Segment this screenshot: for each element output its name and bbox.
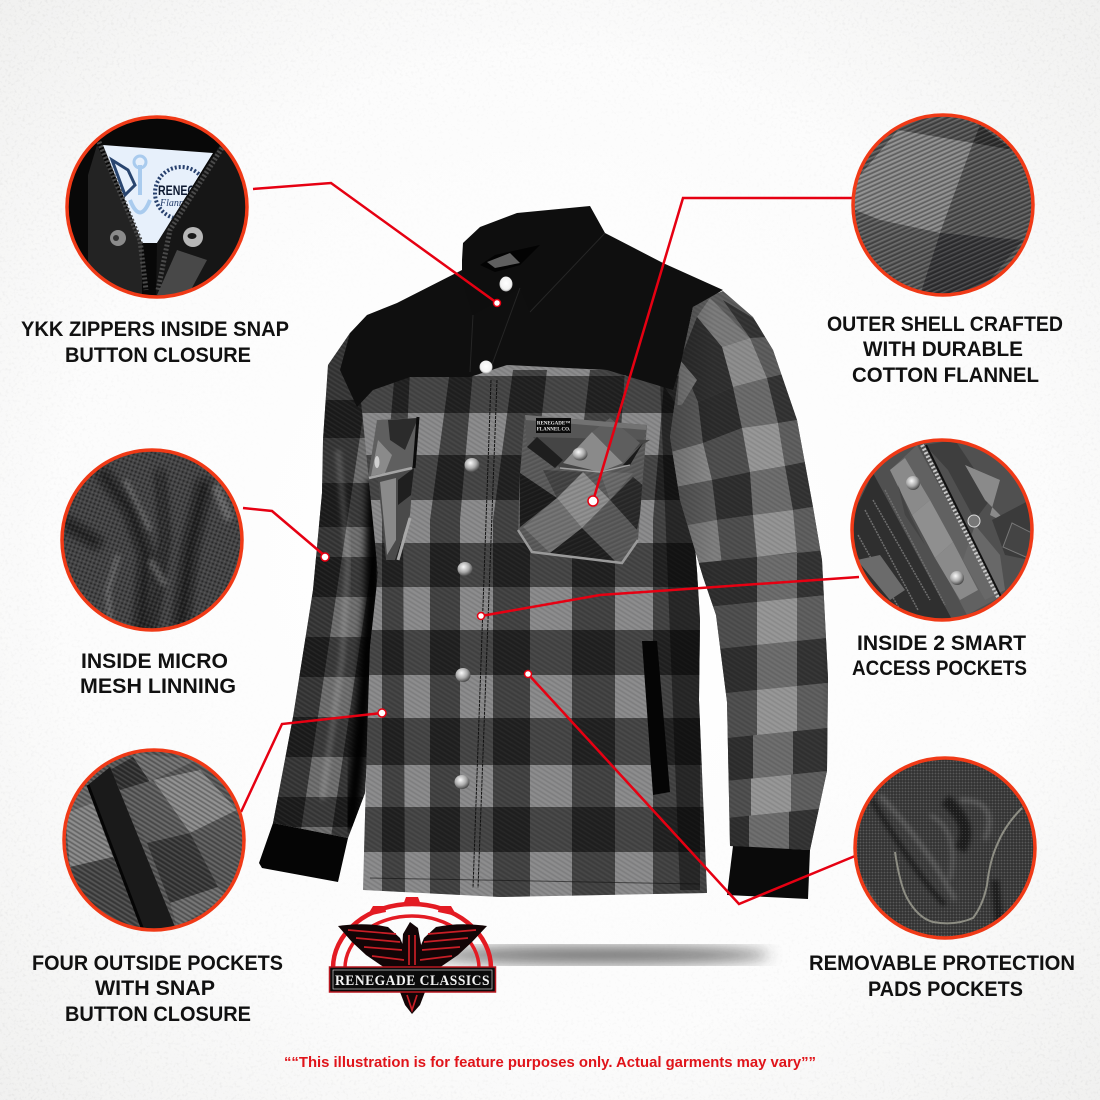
collar [462, 206, 605, 372]
placket checks [890, 445, 1000, 615]
callout line: mesh lining [243, 508, 325, 556]
left cuff [259, 823, 348, 882]
side hand pocket [642, 641, 670, 795]
callout line: outside pockets [241, 713, 382, 812]
caption: mesh lining: MESH LINNING [80, 675, 236, 698]
caption: smart pockets: ACCESS POCKETS [852, 657, 1027, 680]
brand logo [330, 897, 496, 1014]
sleeve shoulder cells [677, 298, 785, 413]
snap buttons [454, 276, 512, 789]
callout line: zippers [253, 183, 497, 303]
sleeve upper plaid cells [670, 374, 820, 568]
left sleeve [273, 333, 378, 838]
caption: outside pockets: WITH SNAP [95, 977, 215, 1000]
upper checks [925, 442, 988, 516]
caption: cotton flannel: COTTON FLANNEL [852, 364, 1039, 387]
disclaimer: ““This illustration is for feature purposes only. Actual garments may vary”” [284, 1054, 816, 1071]
right sleeve [670, 291, 828, 850]
detail circle: cotton flannel [850, 112, 1040, 302]
caption: zippers: BUTTON CLOSURE [65, 344, 251, 367]
caption: zippers: YKK ZIPPERS INSIDE SNAP [21, 318, 289, 341]
zipper [922, 445, 998, 597]
caption: smart pockets: INSIDE 2 SMART [857, 632, 1026, 655]
knit lining [854, 474, 951, 618]
woven label: RENEGADE [158, 182, 218, 198]
yoke [340, 233, 723, 407]
right cuff [727, 846, 810, 899]
left flap [88, 145, 142, 300]
logo banner [330, 967, 496, 992]
right chest pocket [515, 415, 650, 565]
woven label [103, 145, 218, 243]
jacket illustration [241, 206, 842, 900]
eagle [338, 922, 487, 1014]
callout line: protection pads [528, 674, 855, 904]
caption: outside pockets: FOUR OUTSIDE POCKETS [32, 952, 283, 975]
pocket label: FLANNEL CO. [537, 428, 571, 432]
zipper teeth [99, 142, 146, 290]
body plaid [350, 350, 720, 900]
right flap [156, 146, 245, 295]
pocket label [536, 418, 571, 433]
callout anchor dots [321, 300, 598, 717]
detail circle: smart access pockets [848, 436, 1038, 626]
pocket label: RENEGADE™ [537, 420, 570, 426]
pocket binding strap [88, 767, 175, 930]
caption: cotton flannel: OUTER SHELL CRAFTED [827, 313, 1063, 336]
snaps [906, 476, 920, 490]
caption: protection pads: REMOVABLE PROTECTION [809, 952, 1075, 975]
caption: cotton flannel: WITH DURABLE [863, 338, 1023, 361]
detail circle: YKK zipper [65, 115, 249, 299]
gear and arcs [333, 904, 491, 968]
sleeve lower plaid cells [698, 550, 828, 850]
caption: protection pads: PADS POCKETS [868, 978, 1023, 1001]
callout line: cotton flannel [593, 198, 852, 501]
zipper snaps [110, 230, 126, 246]
detail circle: micro mesh [60, 448, 244, 632]
detail circle: protection pads [850, 755, 1040, 945]
left chest pocket [368, 417, 418, 560]
placket stitching [473, 380, 497, 888]
pocket flap [525, 417, 647, 472]
logo banner: RENEGADE CLASSICS [335, 973, 490, 989]
detail circle: outside pocket [60, 745, 250, 935]
caption: mesh lining: INSIDE MICRO [81, 650, 228, 673]
callout line: smart pockets [481, 577, 859, 616]
woven label: Flannel Co. [159, 198, 208, 209]
caption: outside pockets: BUTTON CLOSURE [65, 1003, 251, 1026]
ground shadow [430, 946, 770, 964]
